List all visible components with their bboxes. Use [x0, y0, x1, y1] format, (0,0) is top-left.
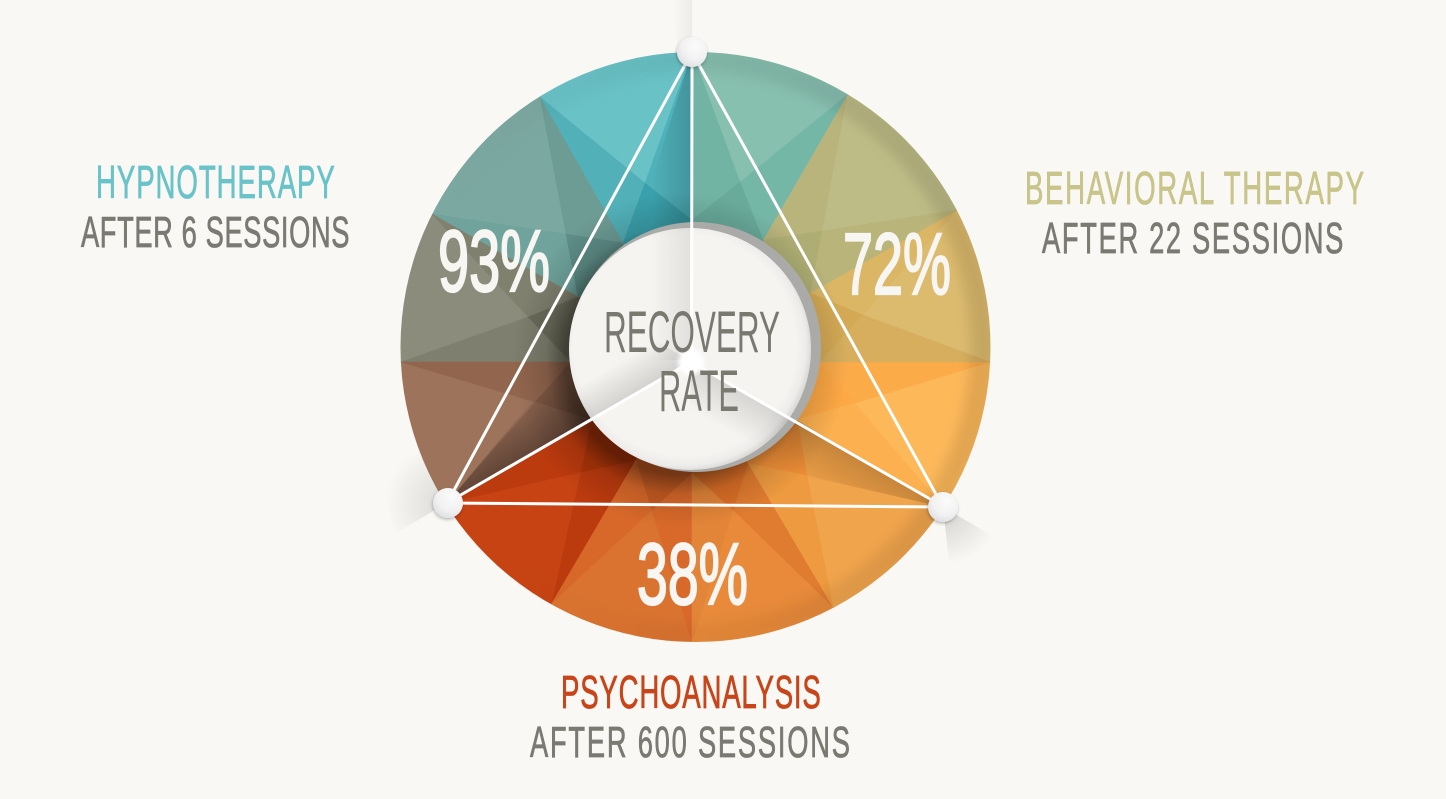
light ray: top	[672, 0, 692, 52]
wedge: light orange	[748, 420, 935, 608]
wedge: orange right	[692, 461, 834, 642]
spokes	[452, 60, 937, 503]
label: behavioral therapy	[1025, 164, 1364, 263]
wedge: red orange	[454, 420, 638, 604]
center disc	[560, 220, 812, 470]
label: hypnotherapy: AFTER 6 SESSIONS	[81, 207, 349, 257]
label: psychoanalysis: PSYCHOANALYSIS	[561, 668, 821, 719]
wedge: grey teal	[432, 96, 624, 297]
disc fold shading	[579, 228, 788, 440]
center title: RECOVERY	[604, 300, 780, 365]
percentages: 93%	[438, 213, 550, 310]
white triangle	[447, 52, 943, 507]
center hub glow	[678, 349, 704, 375]
fold shadow: lower right spoke	[772, 420, 930, 504]
light ray: lower left	[380, 450, 447, 534]
wedge: sea green	[693, 52, 848, 242]
disc cast shadow	[527, 205, 839, 518]
recessed hole	[571, 222, 821, 472]
node: top	[677, 37, 707, 67]
label: behavioral therapy: BEHAVIORAL THERAPY	[1025, 164, 1364, 215]
wedge: taupe	[400, 214, 581, 362]
label: psychoanalysis: AFTER 600 SESSIONS	[530, 717, 850, 767]
rim shading	[614, 52, 990, 641]
label: behavioral therapy: AFTER 22 SESSIONS	[1042, 213, 1343, 263]
wedge: brown	[400, 362, 590, 494]
wedge: ochre	[808, 210, 990, 362]
label: hypnotherapy	[81, 158, 349, 257]
center title	[604, 300, 780, 424]
ring chart: faceted wedges	[400, 52, 990, 642]
wedge: teal	[540, 52, 690, 244]
percentages: 72%	[843, 216, 951, 313]
node: lower right	[928, 492, 958, 522]
percentages	[438, 213, 951, 623]
fold shadow: lower left spoke	[457, 392, 590, 494]
wedge: amber	[798, 362, 990, 498]
fold shadow: top spoke	[663, 66, 690, 226]
percentages: 38%	[637, 526, 748, 623]
wedge: orange left	[551, 458, 692, 642]
center title: RATE	[659, 359, 739, 424]
node: lower left	[433, 488, 463, 518]
label: psychoanalysis	[530, 668, 850, 767]
light ray: lower right	[943, 507, 996, 570]
label: hypnotherapy: HYPNOTHERAPY	[96, 158, 335, 209]
wedge: olive	[763, 94, 957, 294]
